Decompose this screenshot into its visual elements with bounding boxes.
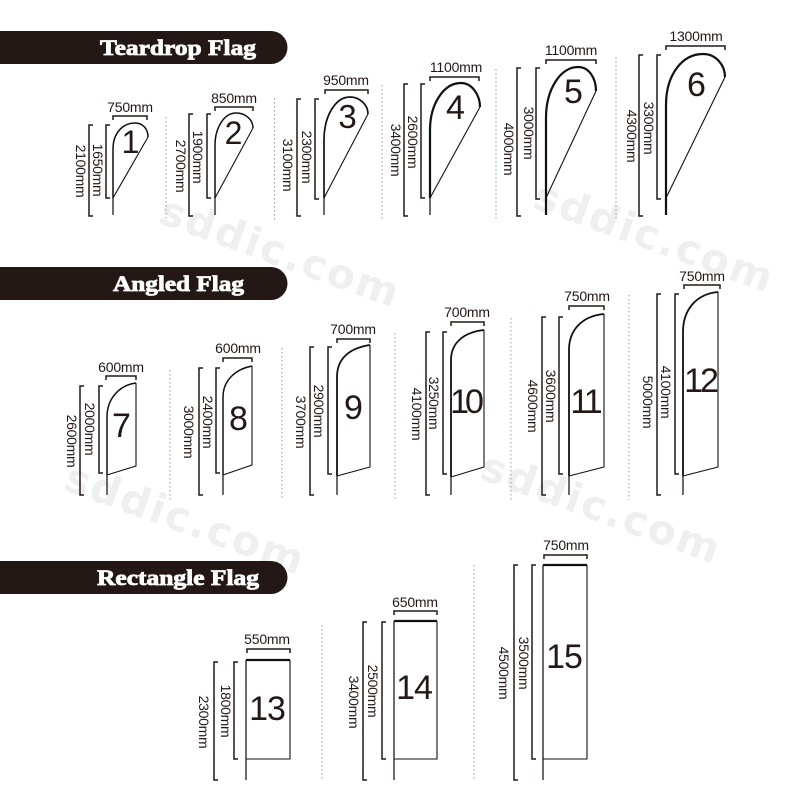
flag 15: 750mm [543, 537, 589, 553]
flag 12: 12 [684, 362, 718, 400]
flag 2: 2700mm [173, 140, 189, 192]
flag 14: 14 [396, 669, 432, 707]
flag 2 [173, 90, 257, 216]
heading: Rectangle Flag [0, 561, 288, 594]
watermarks: sddic.com [154, 186, 408, 318]
flag 13: 2300mm [196, 696, 212, 748]
flag 10: 700mm [444, 304, 490, 320]
watermarks: sddic.com [475, 442, 729, 574]
flag 7: 600mm [98, 359, 144, 375]
flag 4 [388, 59, 482, 216]
flag 9 [293, 321, 376, 495]
flag 5 [501, 42, 597, 216]
flag 6: 4300mm [624, 110, 640, 162]
flag 14: 650mm [392, 594, 438, 610]
flag 6: 6 [687, 66, 705, 104]
flag 5: 1100mm [545, 42, 597, 58]
flag 11: 4600mm [525, 380, 541, 432]
flag 1: 1650mm [90, 144, 106, 196]
heading: Teardrop Flag [0, 31, 288, 64]
heading: Rectangle Flag: Rectangle Flag [97, 565, 259, 590]
flag 14 [346, 594, 438, 780]
flag 8: 8 [229, 400, 247, 438]
flag 5: 4000mm [501, 123, 517, 175]
flag 15: 3500mm [516, 637, 532, 689]
flag 6: 3300mm [641, 102, 657, 154]
flag 10: 3250mm [426, 377, 442, 429]
flag 4: 3400mm [388, 124, 404, 176]
flag 2: 850mm [211, 90, 257, 106]
flag 12: 5000mm [640, 376, 656, 428]
watermarks: sddic.com [528, 171, 782, 303]
flag 13: 13 [249, 690, 285, 728]
flag 13: 550mm [244, 631, 290, 647]
flag 8: 600mm [215, 340, 261, 356]
flag 1: 2100mm [73, 145, 89, 197]
flag 15 [496, 537, 589, 780]
flag 11: 3600mm [543, 370, 559, 422]
flag 5: 3000mm [521, 107, 537, 159]
flag 3 [280, 72, 369, 216]
flag 11 [525, 288, 610, 495]
flag 4: 1100mm [430, 59, 482, 75]
flag 1: 1 [122, 124, 139, 160]
flag 14: 2500mm [365, 665, 381, 717]
flag 2: 2 [225, 115, 242, 151]
flag 7: 2000mm [82, 403, 98, 455]
flag 2: 1900mm [190, 131, 206, 183]
flag 8: 2400mm [200, 396, 216, 448]
flag 10: 10 [450, 383, 483, 421]
flag 8: 3000mm [181, 406, 197, 458]
flag 1: 750mm [107, 99, 153, 115]
flag 10: 4100mm [409, 388, 425, 440]
flag 6 [624, 28, 725, 216]
flag 12: 750mm [679, 268, 725, 284]
heading: Angled Flag: Angled Flag [113, 271, 244, 296]
flag 9: 2900mm [311, 385, 327, 437]
flag 12 [640, 268, 725, 495]
flag 9: 9 [344, 389, 362, 427]
flag 15: 4500mm [496, 647, 512, 699]
flag 7 [64, 359, 144, 495]
dotted separators [166, 57, 629, 780]
flag 15: 15 [546, 638, 582, 676]
flag 3: 3 [338, 98, 356, 135]
flag 10 [409, 304, 490, 495]
flag 8 [181, 340, 261, 495]
flag 12: 4100mm [658, 366, 674, 418]
flag 7: 7 [112, 407, 130, 445]
flag 9: 700mm [330, 321, 376, 337]
flag 6: 1300mm [669, 28, 723, 44]
watermarks: sddic.com [59, 453, 313, 585]
heading: Teardrop Flag: Teardrop Flag [100, 35, 256, 60]
flag 4: 4 [446, 89, 464, 127]
flag 11: 750mm [564, 288, 610, 304]
watermarks [59, 171, 782, 585]
heading: Angled Flag [0, 267, 288, 300]
flag 4: 2600mm [405, 116, 421, 168]
flag 1 [73, 99, 153, 216]
flag 13: 1800mm [218, 685, 234, 737]
flag 3: 2300mm [299, 131, 315, 183]
flag 3: 3100mm [280, 139, 296, 191]
flag 11: 11 [570, 383, 602, 421]
flag 5: 5 [564, 73, 582, 111]
flag 9: 3700mm [293, 396, 309, 448]
flag 14: 3400mm [346, 676, 362, 728]
flag 3: 950mm [323, 72, 369, 88]
flag 13 [196, 631, 290, 780]
flag 7: 2600mm [64, 415, 80, 467]
